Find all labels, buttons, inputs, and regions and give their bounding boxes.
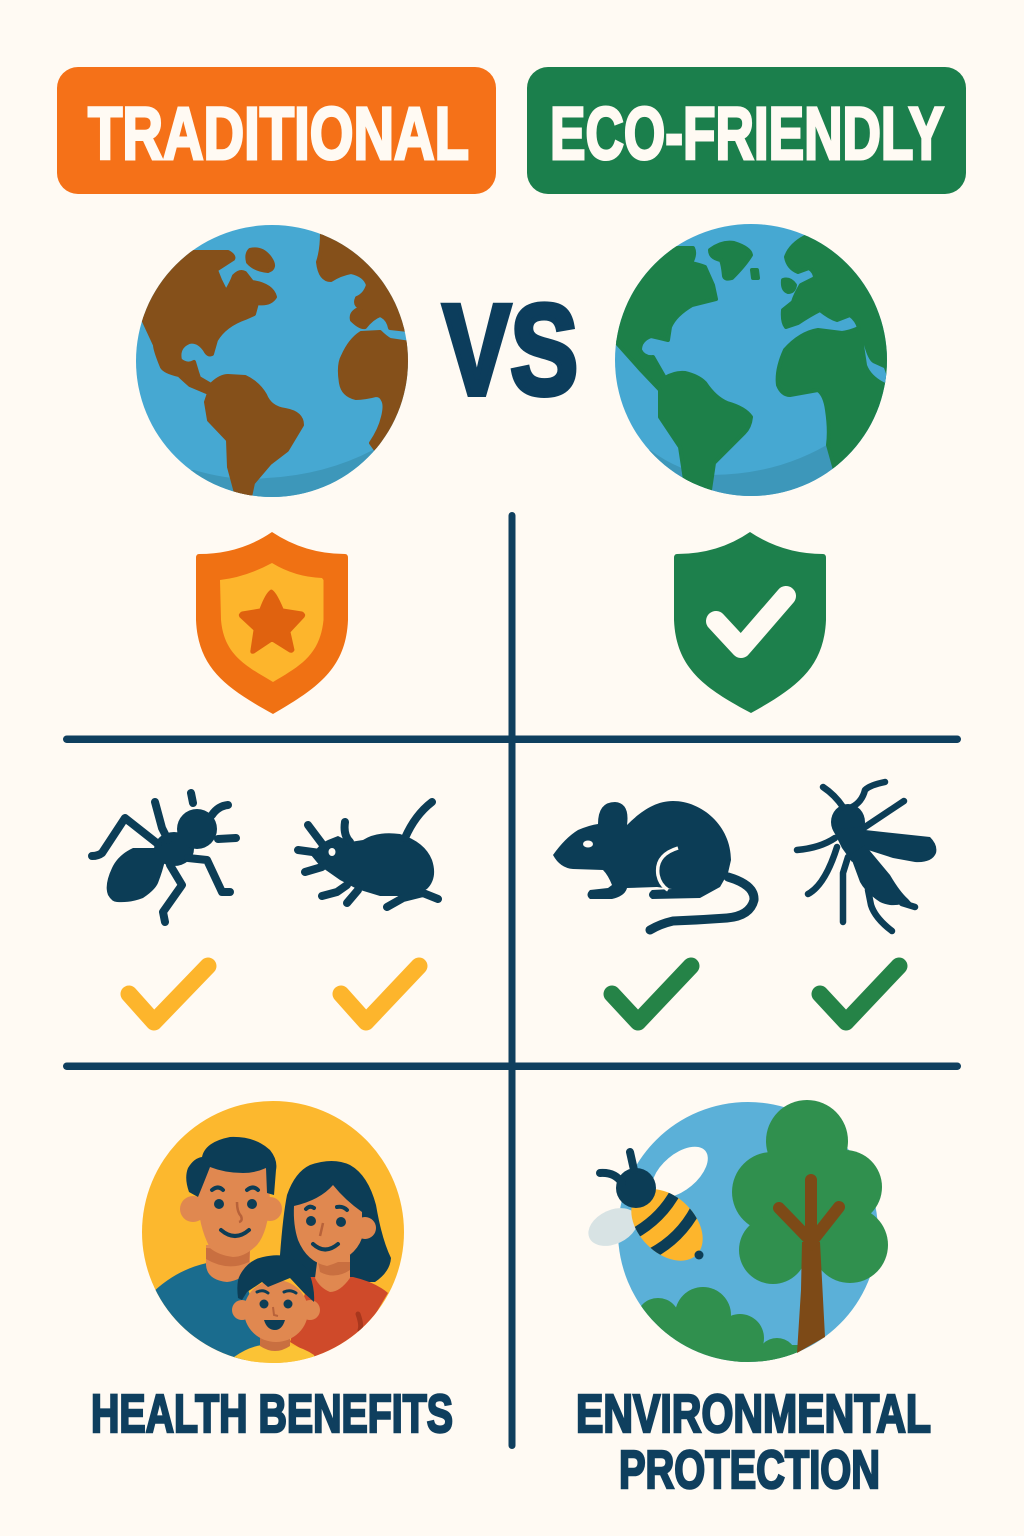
caption: environmental protection: PROTECTION bbox=[619, 1440, 880, 1500]
globe: eco-friendly green continents bbox=[615, 224, 887, 496]
man's shirt bbox=[156, 1263, 260, 1360]
bee bbox=[588, 1146, 708, 1261]
child bbox=[230, 1255, 320, 1370]
icon: ant bbox=[92, 793, 236, 922]
VS label: VS bbox=[443, 279, 578, 422]
woman bbox=[280, 1161, 391, 1357]
header: traditional: TRADITIONAL bbox=[88, 92, 469, 175]
header: traditional bbox=[57, 67, 496, 194]
grid dividers bbox=[63, 512, 961, 1449]
globe: traditional brown continents bbox=[136, 225, 408, 497]
icon: eco shield with check bbox=[674, 532, 826, 713]
bushes bbox=[641, 1287, 800, 1362]
icon: green check marks bbox=[612, 966, 899, 1022]
icon: beetle bbox=[298, 802, 438, 907]
illustration: bee and tree on blue circle bbox=[582, 1100, 888, 1378]
header: eco-friendly bbox=[527, 67, 966, 194]
icon: rat bbox=[553, 801, 754, 930]
caption: health benefits: HEALTH BENEFITS bbox=[91, 1384, 453, 1444]
tree bbox=[732, 1100, 888, 1353]
icon: mosquito bbox=[797, 782, 936, 931]
icon: yellow check marks bbox=[129, 966, 419, 1022]
man's head bbox=[180, 1137, 282, 1257]
illustration: family on yellow circle bbox=[142, 1101, 404, 1370]
icon: traditional shield with star bbox=[196, 532, 348, 714]
caption: environmental protection bbox=[576, 1384, 931, 1500]
